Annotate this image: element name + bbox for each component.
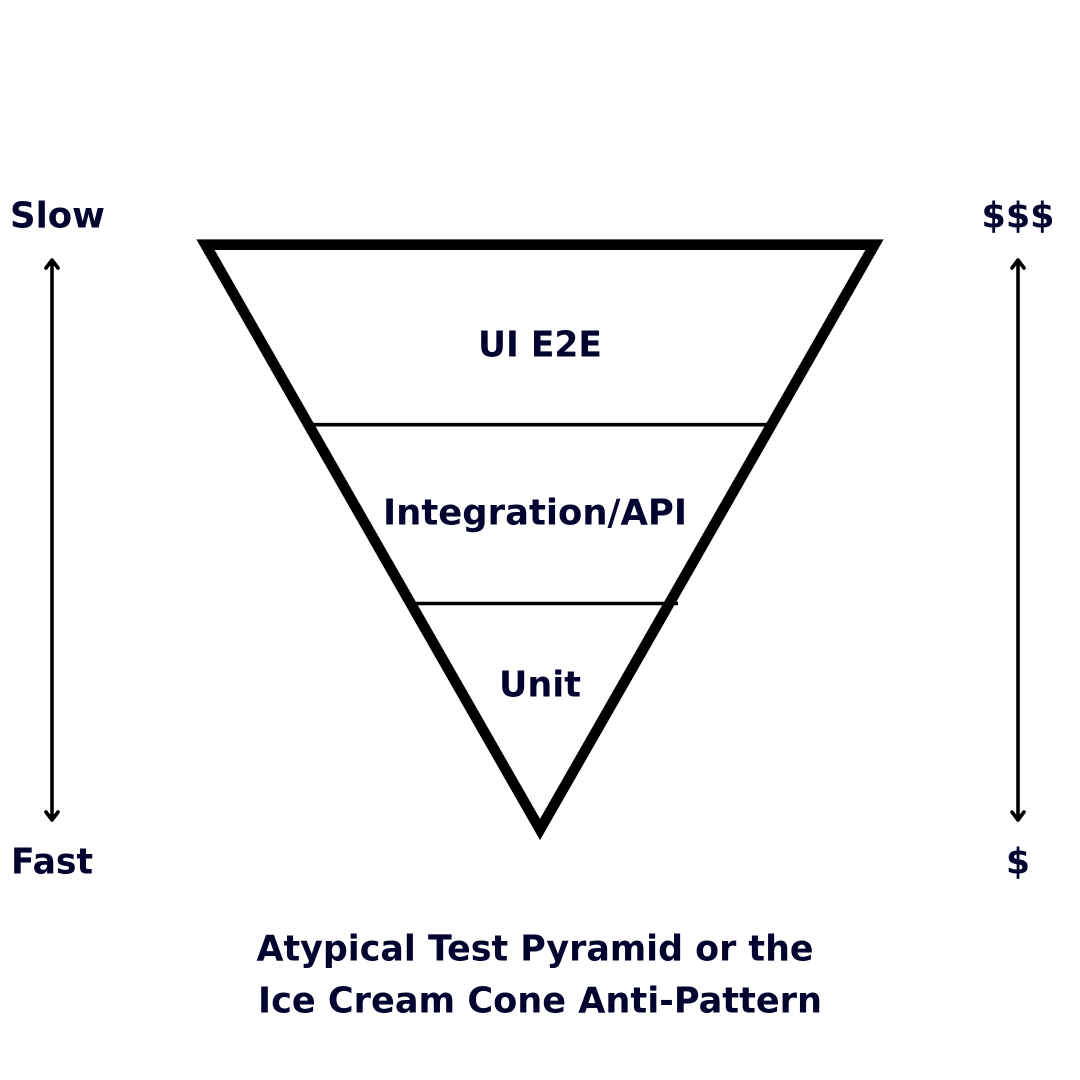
tier divider: lower [414, 602, 678, 605]
caption [256, 928, 822, 1021]
label: Integration/API: Integration/API [383, 492, 687, 533]
inverted pyramid [206, 245, 874, 829]
label: Fast: Fast [11, 841, 93, 882]
label: high cost: $$$ [982, 195, 1054, 236]
triangle outline [206, 245, 874, 829]
label: low cost: $ [1006, 841, 1030, 882]
label: Unit: Unit [499, 664, 581, 705]
caption line 2: Ice Cream Cone Anti-Pattern [258, 980, 822, 1021]
caption line 1: Atypical Test Pyramid or the [256, 928, 814, 969]
tier divider: upper [312, 423, 769, 427]
label: UI E2E: UI E2E [478, 324, 602, 365]
label: Slow: Slow [10, 195, 105, 236]
arrow: speed [46, 260, 58, 820]
arrow: cost [1012, 260, 1024, 820]
